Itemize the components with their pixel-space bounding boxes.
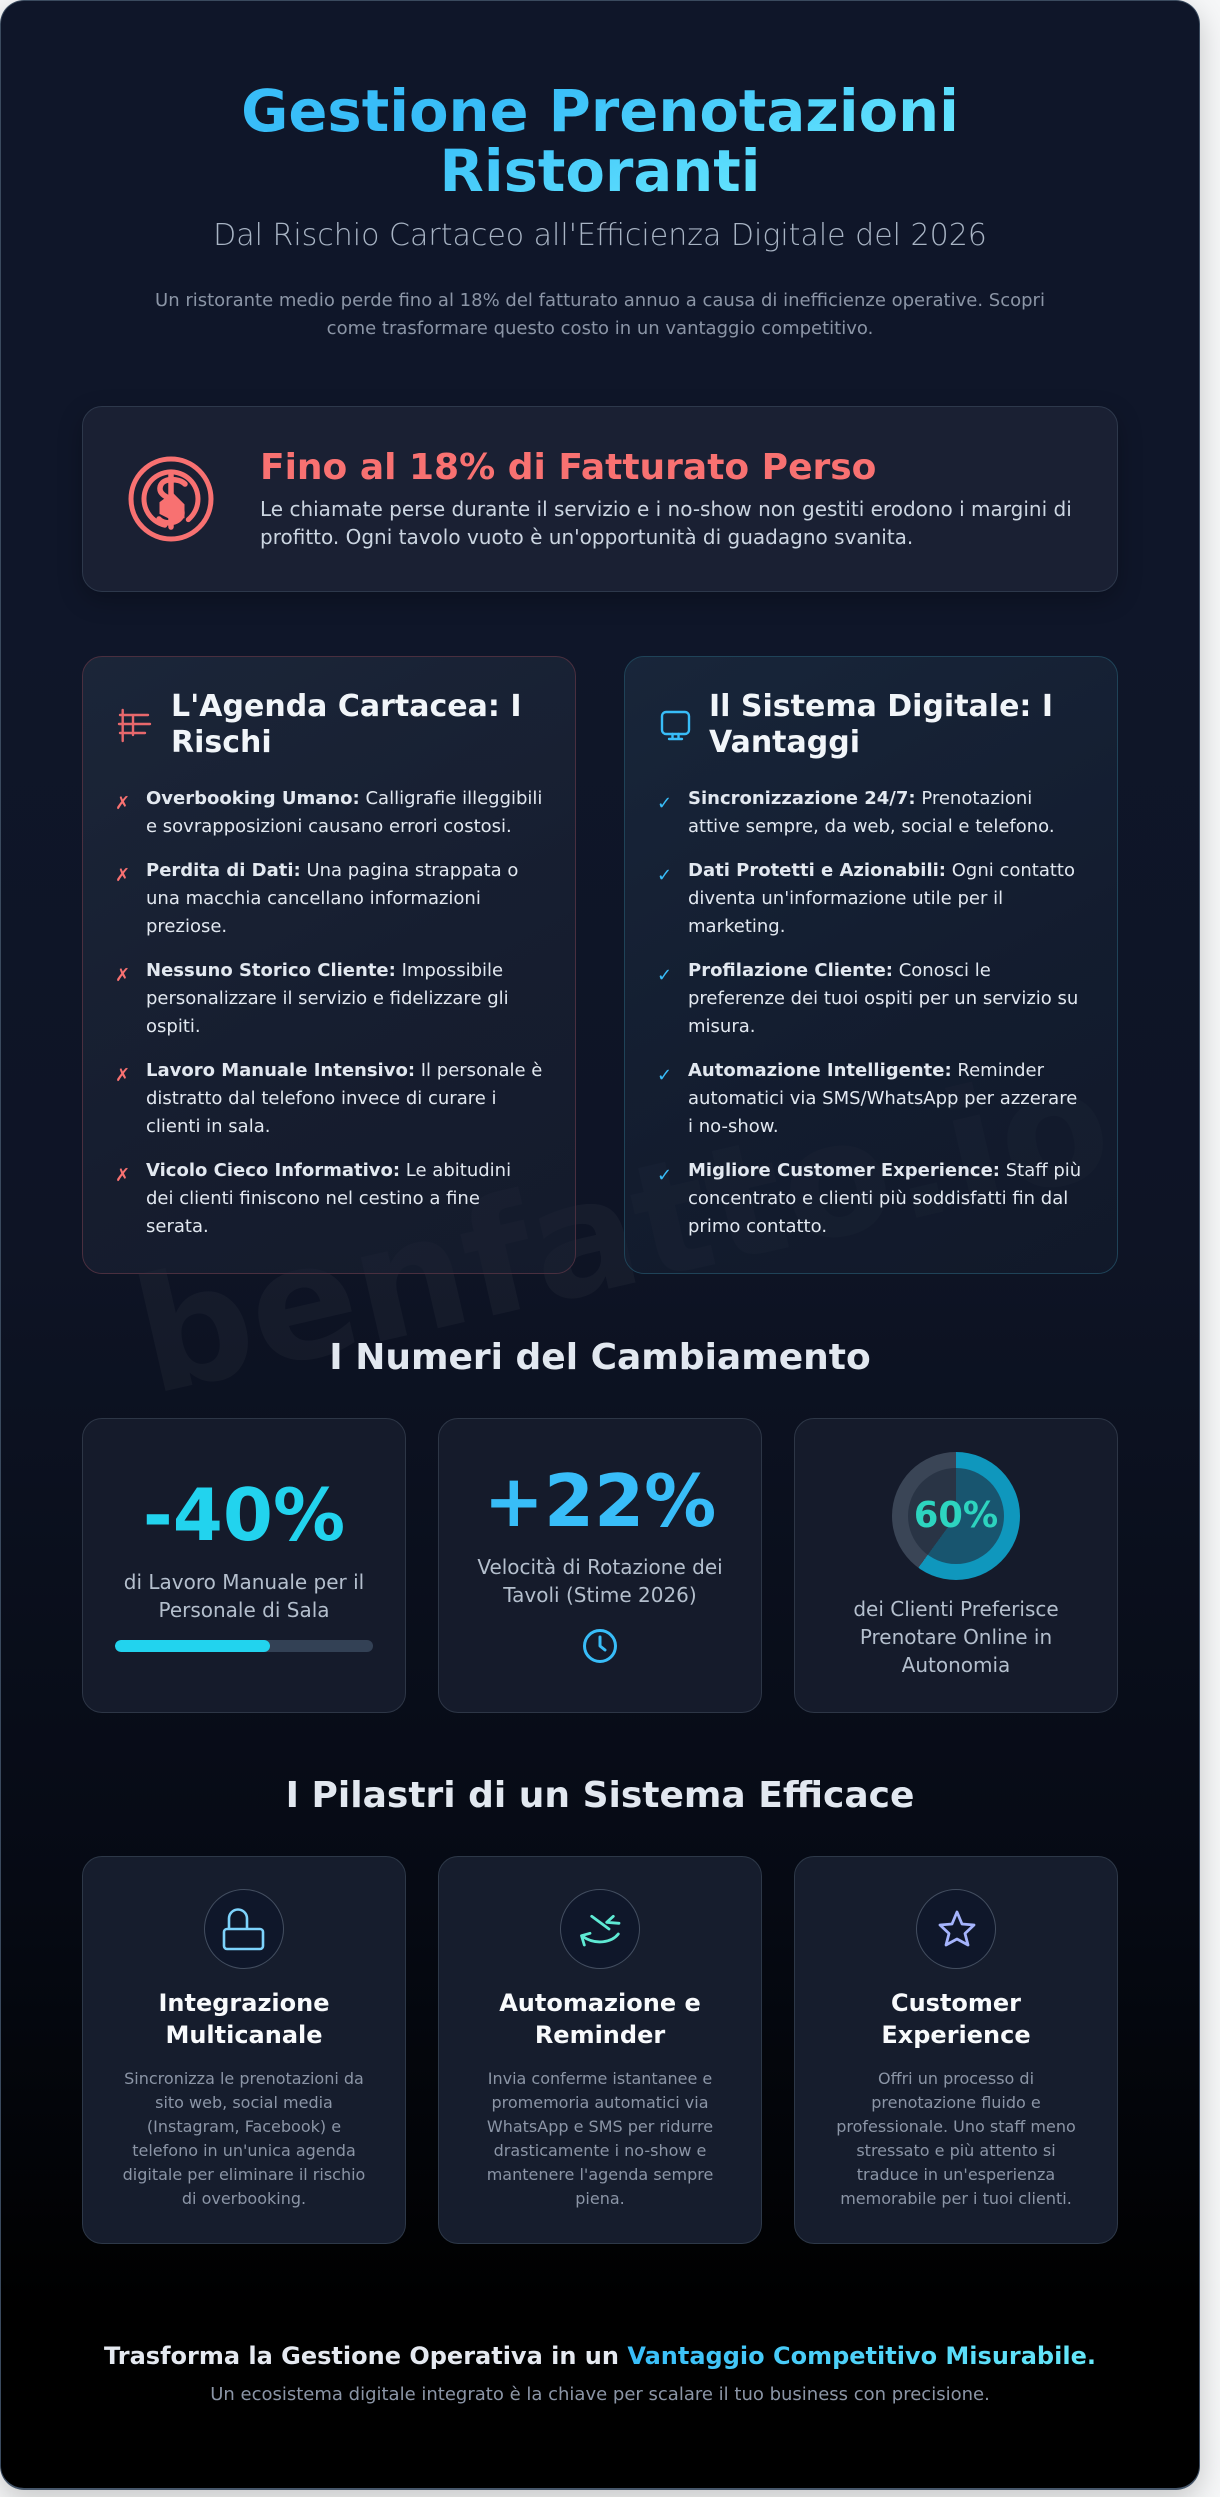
risk: no history: personalizzare il servizio e fidelizzare gli bbox=[146, 988, 509, 1009]
donut inner bbox=[908, 1468, 1004, 1564]
advantage: experience: concentrato e clienti più soddisfatti fin dal bbox=[688, 1188, 1068, 1209]
advantage: experience: primo contatto. bbox=[688, 1216, 827, 1237]
advantage: data bbox=[657, 860, 1075, 937]
risk: no history: ospiti. bbox=[146, 1016, 201, 1037]
advantage: sync: attive sempre, da web, social e telefono. bbox=[688, 816, 1055, 837]
risk: overbooking: e sovrapposizioni causano errori costosi. bbox=[146, 816, 512, 837]
donut chart bbox=[892, 1452, 1020, 1580]
pillar text: drasticamente i no-show e bbox=[494, 2141, 706, 2160]
list of risks bbox=[115, 788, 542, 1237]
risk: data loss bbox=[115, 860, 518, 937]
pillar title bbox=[158, 1989, 330, 2049]
panel: paper agenda risks: ✗ bbox=[115, 865, 130, 886]
risk: dead end: Vicolo Cieco Informativo: Le abitudini bbox=[146, 1160, 511, 1181]
heading: pillars: I Pilastri di un Sistema Efficace bbox=[286, 1775, 914, 1816]
pillar text: telefono in un'unica agenda bbox=[132, 2141, 356, 2160]
pillar title: Reminder bbox=[535, 2021, 665, 2049]
list of advantages bbox=[657, 788, 1081, 1237]
advantage: data: diventa un'informazione utile per il bbox=[688, 888, 1003, 909]
pillar text: memorabile per i tuoi clienti. bbox=[840, 2189, 1072, 2208]
title: Ristoranti bbox=[439, 138, 760, 205]
heading: digital system: Vantaggi bbox=[709, 725, 860, 760]
intro text bbox=[155, 290, 1045, 339]
advantage: data: Dati Protetti e Azionabili: Ogni contatto bbox=[688, 860, 1075, 881]
advantage: automation bbox=[657, 1060, 1077, 1137]
risk: manual work: clienti in sala. bbox=[146, 1116, 270, 1137]
risk: data loss: preziose. bbox=[146, 916, 227, 937]
pillar title: Integrazione bbox=[158, 1989, 330, 2017]
panel: digital system advantages: ✓ bbox=[657, 1065, 672, 1086]
pillar text bbox=[123, 2069, 365, 2208]
pillar title: Automazione e bbox=[499, 1989, 701, 2017]
risk: manual work: Lavoro Manuale Intensivo: Il personale è bbox=[146, 1060, 542, 1081]
pillar text: piena. bbox=[575, 2189, 625, 2208]
pillar text: Sincronizza le prenotazioni da bbox=[124, 2069, 364, 2088]
stat label bbox=[477, 1555, 723, 1607]
pillar title: Customer bbox=[891, 1989, 1021, 2017]
advantage: profiling: Profilazione Cliente: Conosci le bbox=[688, 960, 991, 981]
panel: revenue loss callout bbox=[82, 406, 1118, 592]
stat label: Velocità di Rotazione dei bbox=[477, 1555, 723, 1579]
progress bar bbox=[115, 1640, 373, 1652]
pillar title bbox=[499, 1989, 701, 2049]
stat value: +22% bbox=[484, 1459, 716, 1543]
icon: clock bbox=[583, 1629, 617, 1663]
panel: pillar integration bbox=[82, 1856, 406, 2244]
risk: dead end: dei clienti finiscono nel cestino a fine bbox=[146, 1188, 480, 1209]
stat label: Autonomia bbox=[902, 1653, 1010, 1677]
pillar text: digitale per eliminare il rischio bbox=[123, 2165, 365, 2184]
footer text: Un ecosistema digitale integrato è la chiave per scalare il tuo business con precisione. bbox=[210, 2384, 990, 2405]
icon: dollar target bbox=[128, 456, 214, 542]
advantage: automation: Automazione Intelligente: Reminder bbox=[688, 1060, 1044, 1081]
risk: no history bbox=[115, 960, 509, 1037]
stat label: Prenotare Online in bbox=[860, 1625, 1052, 1649]
advantage: automation: automatici via SMS/WhatsApp per azzerare bbox=[688, 1088, 1077, 1109]
pillar text: Offri un processo di bbox=[878, 2069, 1034, 2088]
pillar title bbox=[881, 1989, 1031, 2049]
title: Gestione Prenotazioni bbox=[241, 78, 959, 145]
advantage: data: marketing. bbox=[688, 916, 785, 937]
stat label bbox=[853, 1597, 1059, 1677]
advantage: profiling: preferenze dei tuoi ospiti per un servizio su bbox=[688, 988, 1078, 1009]
callout text: profitto. Ogni tavolo vuoto è un'opportunità di guadagno svanita. bbox=[260, 525, 913, 549]
panel: paper agenda risks: ✗ bbox=[115, 1165, 130, 1186]
icon: sync arrows bbox=[560, 1889, 640, 1969]
icon: star bbox=[916, 1889, 996, 1969]
panel: stat 60 bbox=[794, 1418, 1118, 1713]
risk: data loss: una macchia cancellano informazioni bbox=[146, 888, 481, 909]
advantage: automation: i no-show. bbox=[688, 1116, 779, 1137]
watermark: benfatto.io bbox=[120, 1029, 1126, 1431]
panel: digital system advantages: ✓ bbox=[657, 965, 672, 986]
panel: pillar experience bbox=[794, 1856, 1118, 2244]
pillar title: Experience bbox=[881, 2021, 1031, 2049]
panel: digital system advantages bbox=[624, 656, 1118, 1274]
icon: monitor bbox=[660, 710, 690, 740]
advantage: profiling: misura. bbox=[688, 1016, 755, 1037]
footer headline: Trasforma la Gestione Operativa in un Vantaggio Competitivo Misurabile. bbox=[104, 2342, 1096, 2370]
intro text: Un ristorante medio perde fino al 18% del fatturato annuo a causa di inefficienze operative. Scopri bbox=[155, 290, 1045, 311]
risk: dead end bbox=[115, 1160, 511, 1237]
pillar text: promemoria automatici via bbox=[491, 2093, 709, 2112]
stat label bbox=[124, 1570, 364, 1622]
pillar text: mantenere l'agenda sempre bbox=[487, 2165, 713, 2184]
heading: paper agenda bbox=[171, 689, 521, 760]
risk: no history: Nessuno Storico Cliente: Impossibile bbox=[146, 960, 503, 981]
pillar text: stressato e più attento si bbox=[856, 2141, 1056, 2160]
panel: paper agenda risks bbox=[82, 656, 576, 1274]
advantage: sync bbox=[657, 788, 1055, 837]
pillar text: prenotazione fluido e bbox=[871, 2093, 1041, 2112]
risk: manual work: distratto dal telefono invece di curare i bbox=[146, 1088, 497, 1109]
title bbox=[241, 78, 959, 205]
risk: overbooking: Overbooking Umano: Calligrafie illeggibili bbox=[146, 788, 542, 809]
risk: manual work bbox=[115, 1060, 542, 1137]
callout text: Le chiamate perse durante il servizio e i no-show non gestiti erodono i margini di bbox=[260, 497, 1072, 521]
pillar text: Invia conferme istantanee e bbox=[488, 2069, 712, 2088]
panel: paper agenda risks: ✗ bbox=[115, 793, 130, 814]
donut value: 60% bbox=[914, 1495, 998, 1536]
panel: paper agenda risks: ✗ bbox=[115, 1065, 130, 1086]
advantage: profiling bbox=[657, 960, 1078, 1037]
panel: stat plus 22 bbox=[438, 1418, 762, 1713]
pillar text: di overbooking. bbox=[182, 2189, 306, 2208]
pillar text: professionale. Uno staff meno bbox=[836, 2117, 1076, 2136]
pillar text: (Instagram, Facebook) e bbox=[147, 2117, 341, 2136]
panel: digital system advantages: ✓ bbox=[657, 865, 672, 886]
callout text bbox=[260, 497, 1072, 549]
advantage: sync: Sincronizzazione 24/7: Prenotazioni bbox=[688, 788, 1032, 809]
subtitle: Dal Rischio Cartaceo all'Efficienza Digitale del 2026 bbox=[213, 218, 987, 253]
advantage: experience bbox=[657, 1160, 1081, 1237]
risk: overbooking bbox=[115, 788, 542, 837]
pillar text: WhatsApp e SMS per ridurre bbox=[487, 2117, 713, 2136]
stat label: Tavoli (Stime 2026) bbox=[503, 1583, 697, 1607]
panel: paper agenda risks: ✗ bbox=[115, 965, 130, 986]
pillar text bbox=[487, 2069, 713, 2208]
pillar title: Multicanale bbox=[165, 2021, 323, 2049]
stat value: -40% bbox=[143, 1473, 345, 1557]
heading: paper agenda: L'Agenda Cartacea: I bbox=[171, 689, 521, 724]
icon: lock bbox=[204, 1889, 284, 1969]
pillar text: traduce in un'esperienza bbox=[857, 2165, 1055, 2184]
panel: digital system advantages: ✓ bbox=[657, 1165, 672, 1186]
risk: data loss: Perdita di Dati: Una pagina strappata o bbox=[146, 860, 518, 881]
advantage: experience: Migliore Customer Experience: Staff più bbox=[688, 1160, 1081, 1181]
heading: digital system bbox=[709, 689, 1053, 760]
stat label: Personale di Sala bbox=[158, 1598, 330, 1622]
heading: digital system: Il Sistema Digitale: I bbox=[709, 689, 1053, 724]
risk: dead end: serata. bbox=[146, 1216, 209, 1237]
pillar text bbox=[836, 2069, 1076, 2208]
stat label: di Lavoro Manuale per il bbox=[124, 1570, 364, 1594]
icon: paper grid bbox=[118, 708, 152, 742]
panel: pillar automation bbox=[438, 1856, 762, 2244]
callout heading: Fino al 18% di Fatturato Perso bbox=[260, 447, 876, 488]
heading: numbers: I Numeri del Cambiamento bbox=[329, 1337, 871, 1378]
pillar text: sito web, social media bbox=[155, 2093, 333, 2112]
stat label: dei Clienti Preferisce bbox=[853, 1597, 1059, 1621]
panel: digital system advantages: ✓ bbox=[657, 793, 672, 814]
heading: paper agenda: Rischi bbox=[171, 725, 272, 760]
panel: stat minus 40 bbox=[82, 1418, 406, 1713]
intro text: come trasformare questo costo in un vantaggio competitivo. bbox=[327, 318, 873, 339]
